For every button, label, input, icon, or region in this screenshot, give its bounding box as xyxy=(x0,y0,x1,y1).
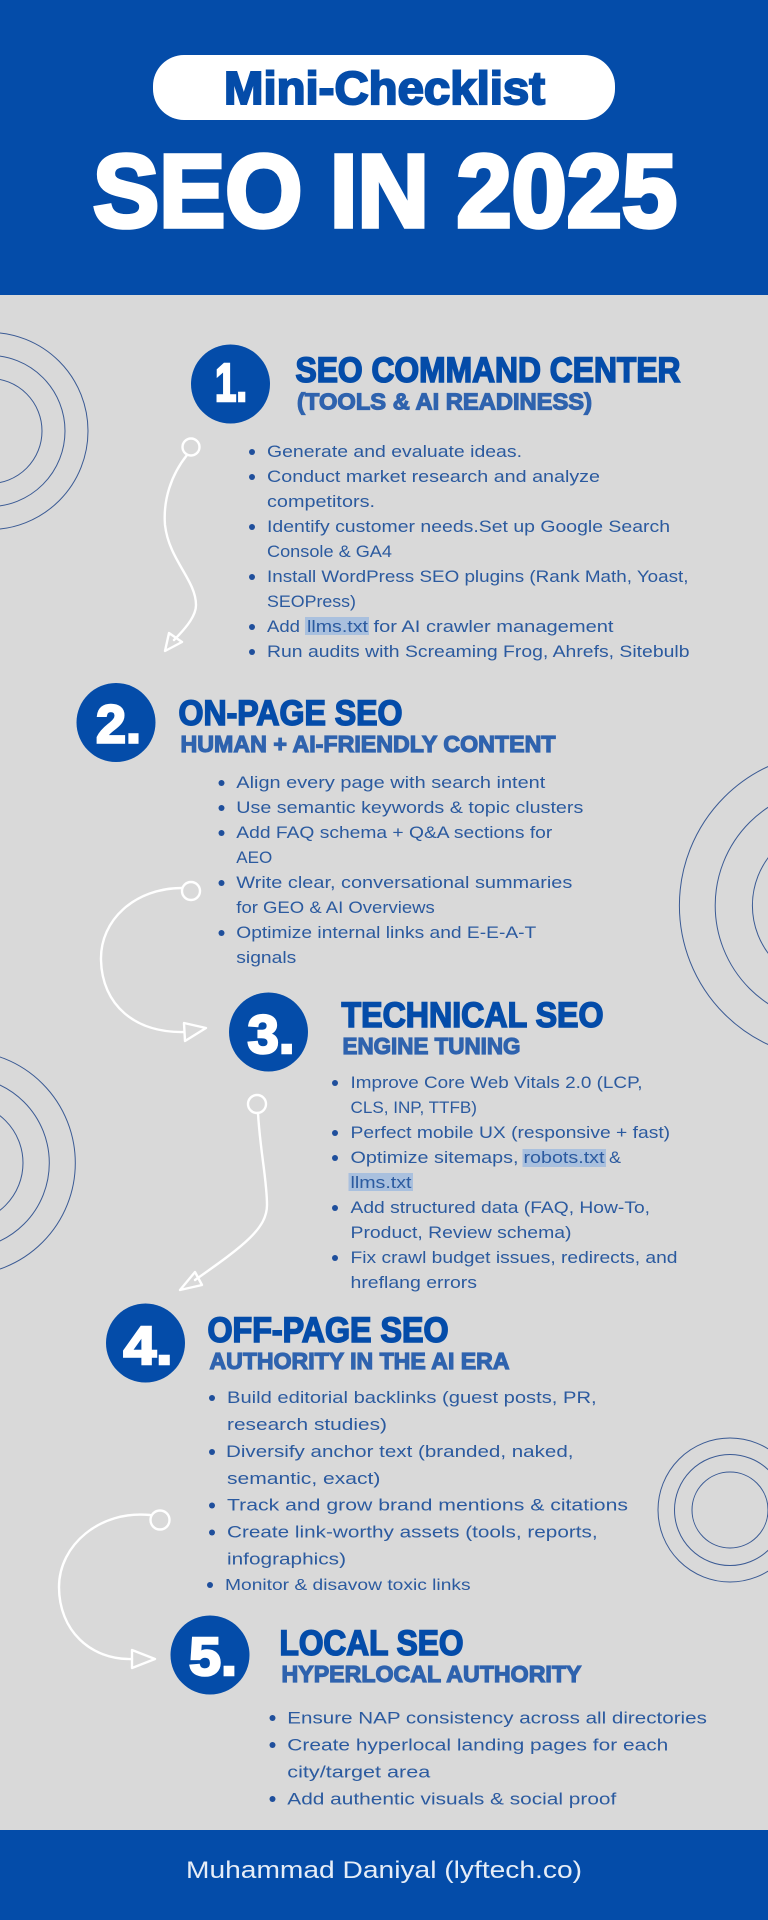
checklist 3: llms.txt xyxy=(350,1173,412,1192)
checklist 1: Identify customer needs.Set up Google Search xyxy=(267,517,670,536)
checklist 4: Track and grow brand mentions & citations xyxy=(227,1496,628,1514)
checklist 5: Add authentic visuals & social proof xyxy=(287,1790,617,1808)
checklist 4: Diversify anchor text (branded, naked, xyxy=(226,1442,574,1461)
subheading 1: (TOOLS & AI READINESS) xyxy=(297,388,592,414)
checklist 3: Product, Review schema) xyxy=(350,1223,572,1242)
checklist 3: robots.txt xyxy=(524,1148,605,1167)
footer xyxy=(0,1830,768,1920)
heading 5: LOCAL SEO xyxy=(280,1624,464,1663)
subtitle pill: Mini-Checklist: Mini-Checklist xyxy=(224,62,545,114)
checklist 3: Improve Core Web Vitals 2.0 (LCP, xyxy=(350,1073,642,1092)
decorative concentric circles: right lower xyxy=(658,1438,768,1582)
arrow: from section 1 to section 2 xyxy=(165,438,200,651)
checklist 2: Optimize internal links and E-E-A-T xyxy=(236,923,536,942)
number badge 5: 5. xyxy=(189,1627,237,1687)
checklist 2: Use semantic keywords & topic clusters xyxy=(236,798,583,817)
checklist 5: Ensure NAP consistency across all directories xyxy=(287,1708,707,1728)
number badge 3: 3. xyxy=(248,1005,294,1065)
decorative concentric circles: top left xyxy=(0,332,88,530)
checklist 1: Console & GA4 xyxy=(267,542,392,561)
checklist 1: Add xyxy=(267,617,300,636)
heading 4: OFF-PAGE SEO xyxy=(208,1311,448,1350)
subheading 2: HUMAN + AI-FRIENDLY CONTENT xyxy=(180,731,556,757)
number badge 2: 2. xyxy=(96,694,141,754)
checklist 2: for GEO & AI Overviews xyxy=(236,898,435,917)
checklist 1: llms.txt xyxy=(307,617,368,636)
checklist 3: CLS, INP, TTFB) xyxy=(350,1098,477,1117)
heading 1: SEO COMMAND CENTER xyxy=(296,351,680,390)
checklist 2: signals xyxy=(236,948,296,967)
checklist 1: competitors. xyxy=(267,492,375,511)
checklist 4: semantic, exact) xyxy=(227,1469,380,1488)
subheading 4: AUTHORITY IN THE AI ERA xyxy=(210,1348,510,1374)
heading 3: TECHNICAL SEO xyxy=(342,996,604,1035)
number badge 5 xyxy=(170,1616,250,1694)
heading 2: ON-PAGE SEO xyxy=(178,694,402,733)
checklist 5: Create hyperlocal landing pages for each xyxy=(287,1736,668,1754)
subheading 5: HYPERLOCAL AUTHORITY xyxy=(282,1661,582,1687)
number badge 4: 4. xyxy=(124,1316,172,1376)
checklist 1: Install WordPress SEO plugins (Rank Math, Yoast, xyxy=(267,567,688,586)
footer credit: Muhammad Daniyal (lyftech.co) xyxy=(186,1857,582,1884)
subheading 3: ENGINE TUNING xyxy=(342,1033,520,1059)
panel: section 5 xyxy=(170,1616,707,1808)
number badge 3 xyxy=(229,992,308,1072)
number badge 4 xyxy=(106,1304,185,1382)
arrow: from section 3 to section 4 xyxy=(180,1095,267,1290)
checklist 2: Write clear, conversational summaries xyxy=(236,873,572,892)
subtitle pill: Mini-Checklist xyxy=(153,55,615,120)
number badge 2 xyxy=(76,683,156,762)
checklist 1: Run audits with Screaming Frog, Ahrefs, Sitebulb xyxy=(267,642,690,661)
checklist 3: Perfect mobile UX (responsive + fast) xyxy=(350,1123,670,1142)
checklist 5 xyxy=(270,1708,707,1808)
checklist 2: Add FAQ schema + Q&A sections for xyxy=(236,823,553,842)
checklist 3: hreflang errors xyxy=(350,1273,477,1292)
checklist 4: Build editorial backlinks (guest posts, PR, xyxy=(227,1388,597,1407)
checklist 2 xyxy=(218,773,583,967)
checklist 1: for AI crawler management xyxy=(374,617,614,636)
checklist 4: research studies) xyxy=(227,1415,387,1434)
checklist 2: AEO xyxy=(236,848,272,867)
panel: section 2 xyxy=(76,683,583,967)
checklist 4: infographics) xyxy=(227,1550,346,1568)
checklist 3: Optimize sitemaps, xyxy=(350,1148,518,1167)
checklist 3 xyxy=(332,1073,678,1292)
panel: section 3 xyxy=(229,992,678,1292)
checklist 4: Monitor & disavow toxic links xyxy=(225,1577,471,1594)
checklist 3: & xyxy=(609,1148,622,1167)
panel: section 1 xyxy=(191,344,690,661)
checklist 1: Conduct market research and analyze xyxy=(267,467,600,486)
header banner xyxy=(0,0,768,295)
checklist 1 xyxy=(249,442,690,661)
checklist 1: SEOPress) xyxy=(267,592,356,611)
checklist 3: Fix crawl budget issues, redirects, and xyxy=(350,1248,678,1267)
checklist 2: Align every page with search intent xyxy=(236,773,546,792)
arrow: from section 4 to section 5 xyxy=(59,1510,170,1668)
checklist 3: Add structured data (FAQ, How-To, xyxy=(350,1198,650,1217)
decorative concentric circles: left lower xyxy=(0,1051,75,1275)
checklist 4 xyxy=(207,1388,628,1594)
checklist 1: Generate and evaluate ideas. xyxy=(267,442,522,461)
panel: section 4 xyxy=(106,1304,628,1594)
number badge 1: 1. xyxy=(215,353,247,413)
checklist 5: city/target area xyxy=(287,1762,431,1782)
arrow: from section 2 to section 3 xyxy=(101,882,206,1041)
number badge 1 xyxy=(191,344,270,424)
decorative concentric circles: right upper xyxy=(679,752,768,1059)
checklist 4: Create link-worthy assets (tools, reports, xyxy=(227,1522,598,1542)
title: SEO IN 2025 xyxy=(93,134,677,248)
